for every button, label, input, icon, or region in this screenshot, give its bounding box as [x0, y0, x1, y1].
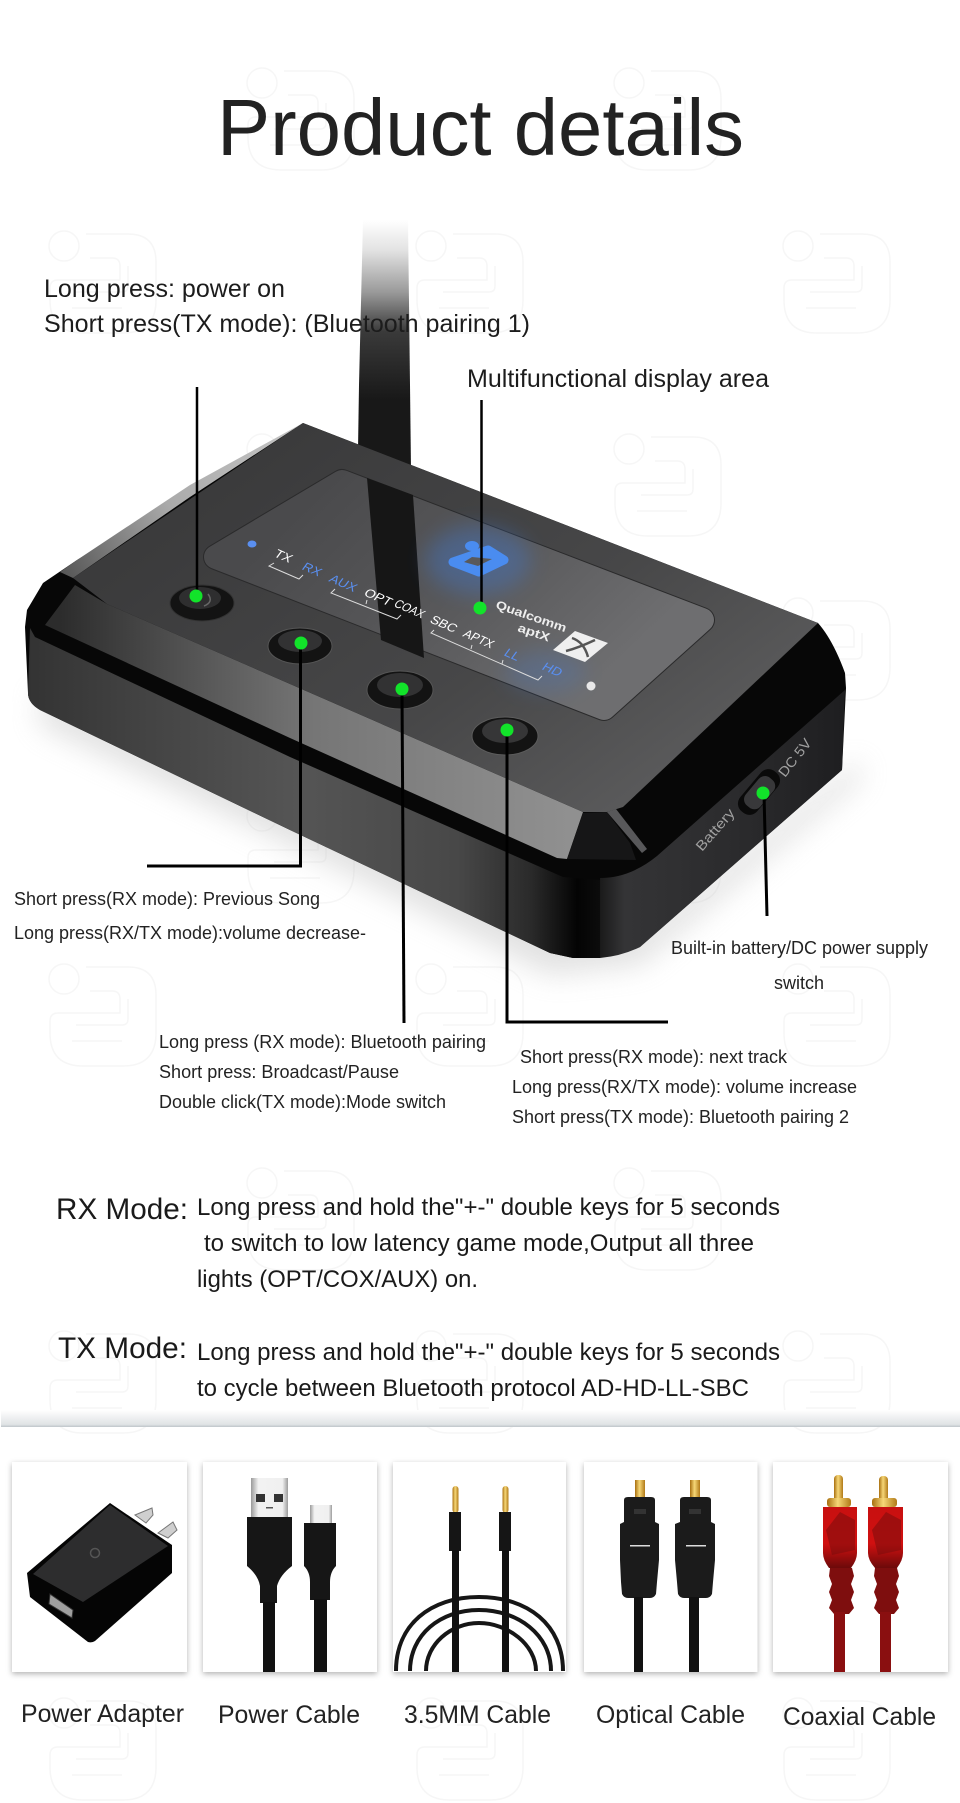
device illustration [25, 220, 860, 975]
TX mode text [197, 1339, 780, 1402]
label: display area: Multifunctional display area [467, 365, 769, 393]
icon: audio jack left [449, 1486, 461, 1672]
icon: blue logo [453, 541, 504, 572]
TX mode heading: TX Mode: [58, 1332, 187, 1365]
device shadow [40, 690, 860, 975]
text: power switch: Built-in battery/DC power supply [671, 938, 928, 958]
icon: adapter body [27, 1503, 172, 1642]
text: mode button [159, 1032, 486, 1112]
RX mode text: Long press and hold the"+-" double keys for 5 seconds [197, 1194, 780, 1221]
qualcomm aptX logo: Qualcomm [494, 598, 569, 635]
RX mode text: to switch to low latency game mode,Output all three [204, 1230, 754, 1257]
text: power button description [44, 275, 530, 338]
RX mode text: lights (OPT/COX/AUX) on. [197, 1266, 478, 1293]
button: next [472, 717, 538, 755]
display mode labels: TX [271, 547, 296, 565]
right side face [600, 690, 845, 958]
RX mode heading: RX Mode: [56, 1193, 188, 1226]
icon: rca plug left [823, 1475, 857, 1672]
front corner facet [567, 812, 636, 860]
text: power button description: Short press(TX mode): (Bluetooth pairing 1) [44, 310, 530, 338]
card: 3.5mm cable [393, 1462, 566, 1672]
icon: adapter prongs [135, 1508, 177, 1538]
accessory labels: Optical Cable [596, 1701, 745, 1729]
device body silhouette [25, 423, 846, 958]
top plate [73, 423, 818, 812]
icon: rca plug right [868, 1476, 903, 1672]
text: next track button: Short press(TX mode): Bluetooth pairing 2 [512, 1107, 849, 1127]
power switch: DC 5V [775, 735, 815, 780]
card: power adapter [12, 1462, 187, 1672]
display mode labels: COAX [391, 597, 429, 621]
icon: small white bluetooth [586, 682, 596, 690]
text: mode button: Double click(TX mode):Mode switch [159, 1092, 446, 1112]
title: Product details [217, 83, 744, 172]
text: power switch [671, 938, 928, 993]
accessory labels: 3.5MM Cable [404, 1701, 551, 1729]
display mode brackets [269, 563, 542, 680]
icon: audio jack right [499, 1486, 511, 1672]
text: previous song button: Short press(RX mode): Previous Song [14, 889, 320, 909]
accessory labels [21, 1700, 936, 1731]
card: optical cable [584, 1462, 758, 1672]
display panel [216, 482, 702, 708]
antenna [358, 220, 411, 470]
TX mode text: to cycle between Bluetooth protocol AD-HD-LL-SBC [197, 1375, 749, 1402]
qualcomm aptX logo: aptX [516, 621, 552, 645]
divider band [1, 1410, 960, 1427]
icon: coiled cable [396, 1597, 563, 1671]
accessory labels: Power Cable [218, 1701, 360, 1729]
icon: toslink plug left [620, 1480, 659, 1672]
left light strip [60, 423, 303, 578]
power switch: Battery [692, 805, 738, 854]
display mode labels: OPT [361, 586, 396, 609]
text: mode button: Long press (RX mode): Bluetooth pairing [159, 1032, 486, 1052]
qualcomm aptX logo [494, 598, 608, 662]
display mode labels: LL [501, 646, 524, 663]
text: next track button: Short press(RX mode): next track [520, 1047, 788, 1067]
text: power button description: Long press: power on [44, 275, 285, 303]
icon: toslink plug right [675, 1480, 715, 1672]
front bevel [45, 585, 583, 859]
icon: small blue bluetooth [248, 540, 256, 548]
card: power cable [203, 1462, 377, 1672]
display mode labels: SBC [427, 613, 461, 635]
leader lines [147, 387, 767, 1023]
display mode labels: APTX [460, 627, 498, 651]
icon: adapter logo [90, 1548, 100, 1558]
power switch [692, 735, 815, 854]
text: power switch: switch [774, 973, 824, 993]
display mode labels: HD [539, 660, 566, 679]
antenna reflection [367, 478, 424, 658]
accessory labels: Coaxial Cable [783, 1703, 936, 1731]
icon: adapter usb port [49, 1594, 73, 1618]
blue logo glow [426, 526, 530, 594]
accessory labels: Power Adapter [21, 1700, 184, 1728]
icon: micro usb plug [304, 1505, 336, 1672]
TX mode text: Long press and hold the"+-" double keys for 5 seconds [197, 1339, 780, 1366]
green marker dots [190, 590, 770, 800]
button: previous [268, 628, 332, 664]
display mode labels: RX [299, 560, 325, 579]
text: next track button [512, 1047, 857, 1127]
text: previous song button: Long press(RX/TX mode):volume decrease- [14, 923, 366, 943]
card: coaxial cable [773, 1462, 948, 1672]
display mode labels [271, 547, 566, 679]
text: mode button: Short press: Broadcast/Pause [159, 1062, 399, 1082]
front face [28, 628, 600, 958]
RX mode text [197, 1194, 780, 1293]
text: previous song button [14, 889, 366, 943]
icon: usb-a plug [247, 1478, 292, 1672]
display mode labels: AUX [326, 572, 361, 595]
button: mode [367, 671, 433, 709]
button: power [170, 585, 234, 621]
text: next track button: Long press(RX/TX mode): volume increase [512, 1077, 857, 1097]
